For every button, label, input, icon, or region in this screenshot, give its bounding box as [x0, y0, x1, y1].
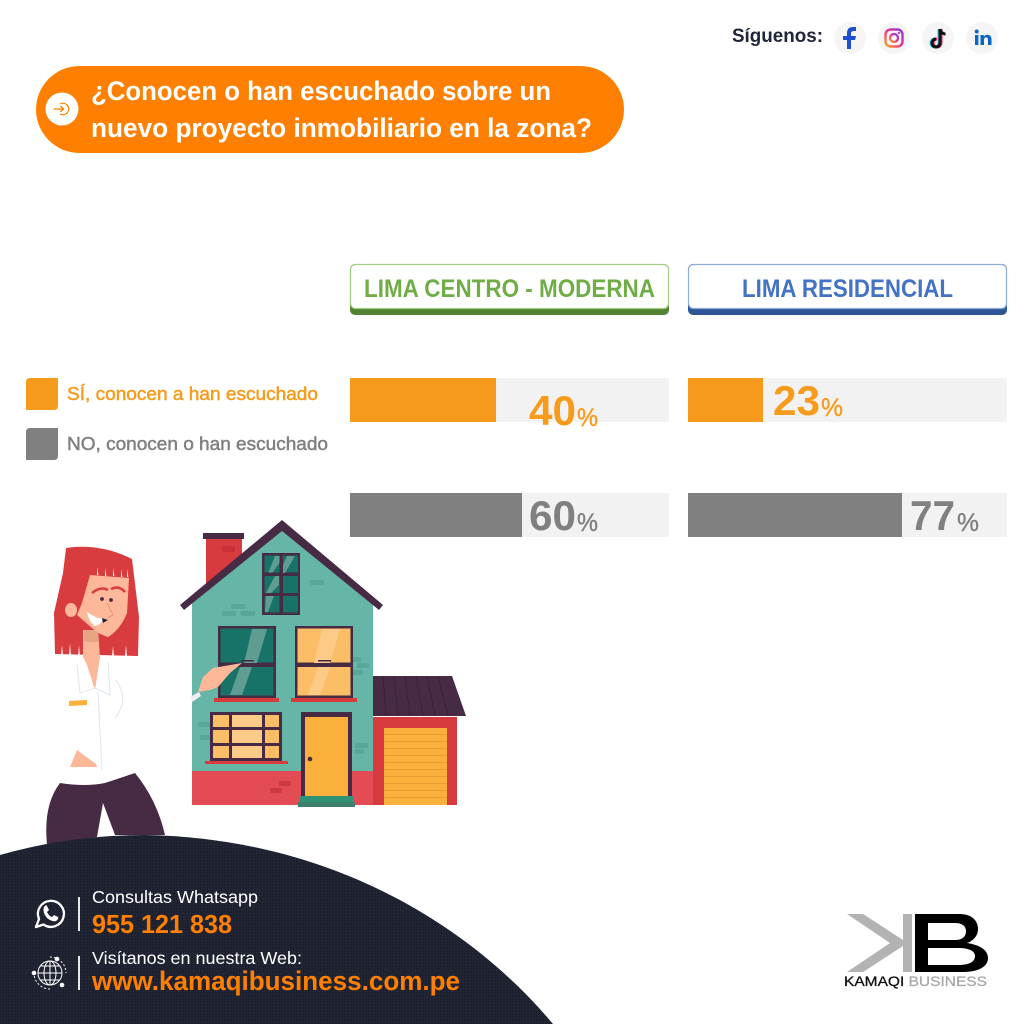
legend item: no: [26, 428, 328, 460]
hair: [54, 547, 139, 656]
lower window: [205, 712, 288, 764]
bar: Lima Residencial no 77%: 77: [910, 492, 955, 539]
title text: ¿Conocen o han escuchado sobre un: [91, 76, 551, 106]
logo K mark: [847, 914, 912, 972]
smile: [87, 612, 103, 626]
eyebrows and eyes: [92, 588, 125, 618]
neck and chest: [83, 630, 100, 690]
lower hand: [70, 750, 97, 767]
logo B mark: [915, 914, 988, 972]
icon: tiktok: [922, 22, 954, 54]
legend: [26, 378, 328, 460]
bricks: [198, 580, 369, 754]
icon: whatsapp: [36, 901, 64, 927]
title text: [91, 76, 592, 143]
web address: www.kamaqibusiness.com.pe: [91, 966, 460, 996]
roof: [180, 520, 383, 610]
chimney: [203, 533, 244, 586]
panel header: Lima Residencial: LIMA RESIDENCIAL: [742, 275, 953, 303]
bar: Lima Centro yes 40%: 40: [529, 387, 576, 434]
name badge: [69, 700, 87, 706]
illustration: woman: [46, 547, 242, 845]
follow label: Síguenos:: [732, 26, 823, 47]
icon: globe: [32, 957, 66, 989]
left window: [214, 626, 279, 702]
attic window: [262, 553, 300, 615]
trousers: [46, 773, 165, 845]
legend item: yes: SÍ, conocen a han escuchado: [67, 383, 318, 404]
web label: Visítanos en nuestra Web:: [92, 948, 302, 968]
panel header: Lima Centro - Moderna: LIMA CENTRO - MODERNA: [364, 275, 655, 303]
bar: Lima Centro no 60%: [350, 492, 669, 539]
bar: Lima Residencial yes 23%: %: [821, 394, 843, 422]
bar: Lima Centro no 60%: 60: [529, 492, 576, 539]
logo wordmark: KAMAQI BUSINESS: [844, 973, 987, 989]
footer panel: [0, 835, 553, 1024]
title text: nuevo proyecto inmobiliario en la zona?: [91, 113, 592, 143]
panel header: Lima Residencial: [688, 264, 1007, 315]
bar: Lima Centro yes 40%: %: [577, 404, 598, 432]
bar: Lima Residencial yes 23%: 23: [773, 377, 820, 424]
hair strand gaps: [61, 643, 127, 657]
phone number: 955 121 838: [92, 909, 232, 939]
bar: Lima Residencial yes 23%: [688, 377, 1007, 424]
bar: Lima Residencial no 77%: %: [957, 509, 979, 537]
right window: [291, 626, 357, 702]
title banner: [36, 66, 624, 153]
logo: Kamaqi Business: [844, 914, 988, 989]
shirt details: [77, 662, 123, 770]
garage: [373, 676, 466, 805]
legend item: no: NO, conocen o han escuchado: [67, 433, 328, 454]
fringe slits: [97, 567, 128, 577]
bar: Lima Residencial no 77%: [688, 492, 1007, 539]
face: [77, 575, 129, 637]
panel header: Lima Centro - Moderna: [350, 264, 669, 315]
divider: [78, 956, 80, 990]
icon: arrow in circle: [46, 92, 78, 126]
social media header: [732, 22, 998, 54]
icon: instagram: [878, 22, 910, 54]
pointing hand: [190, 663, 242, 702]
whatsapp label: Consultas Whatsapp: [92, 887, 258, 907]
bar: Lima Centro no 60%: %: [577, 509, 598, 537]
icon: facebook: [834, 22, 866, 54]
divider: [78, 897, 80, 931]
door: [298, 712, 355, 807]
ear: [65, 603, 77, 617]
legend item: yes: [26, 378, 318, 410]
icon: linkedin: [966, 22, 998, 54]
illustration: house: [180, 520, 466, 807]
house walls: [192, 528, 373, 771]
bar: Lima Centro yes 40%: [350, 378, 669, 434]
